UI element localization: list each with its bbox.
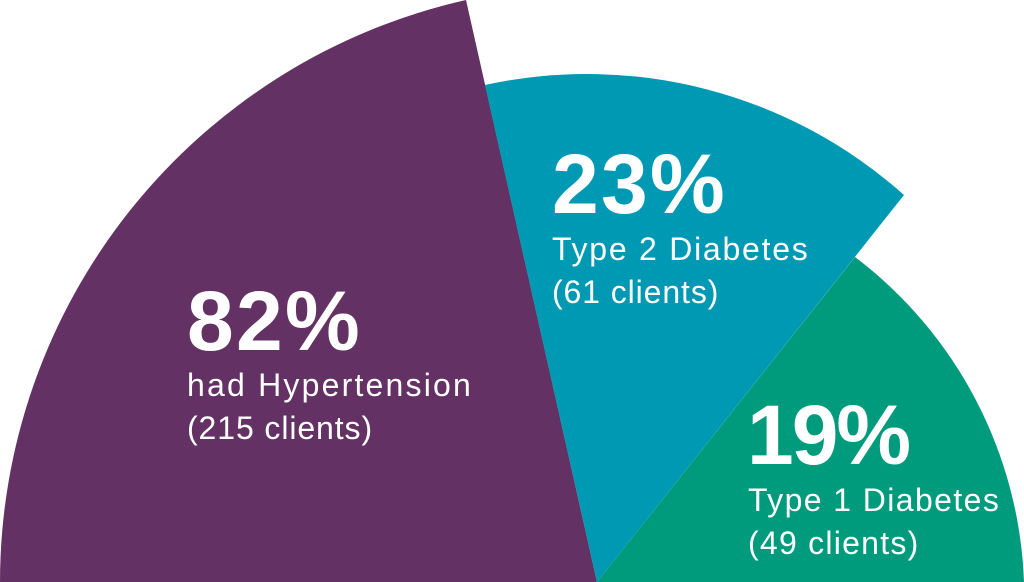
value: 82%: 82% <box>187 274 362 368</box>
label: had Hypertension <box>187 367 473 446</box>
stat: 82% hypertension <box>187 274 473 446</box>
label: Type 1 Diabetes <box>748 482 1000 561</box>
label: Type 2 Diabetes: (61 clients) <box>552 274 719 310</box>
stat: 23% type 2 diabetes <box>552 137 810 310</box>
label: Type 1 Diabetes: Type 1 Diabetes <box>748 482 1000 518</box>
value: 19%: 19% <box>747 388 909 482</box>
label: had Hypertension: had Hypertension <box>187 367 473 403</box>
segment: type 2 diabetes <box>485 74 904 582</box>
label: Type 1 Diabetes: (49 clients) <box>748 525 920 561</box>
segment: hypertension <box>0 0 597 582</box>
stat: 19% type 1 diabetes <box>747 388 1000 561</box>
label: had Hypertension: (215 clients) <box>187 410 373 446</box>
label: Type 2 Diabetes <box>552 231 810 310</box>
segment: type 1 diabetes <box>597 257 1024 582</box>
value: 23%: 23% <box>552 137 727 231</box>
label: Type 2 Diabetes: Type 2 Diabetes <box>552 231 810 267</box>
